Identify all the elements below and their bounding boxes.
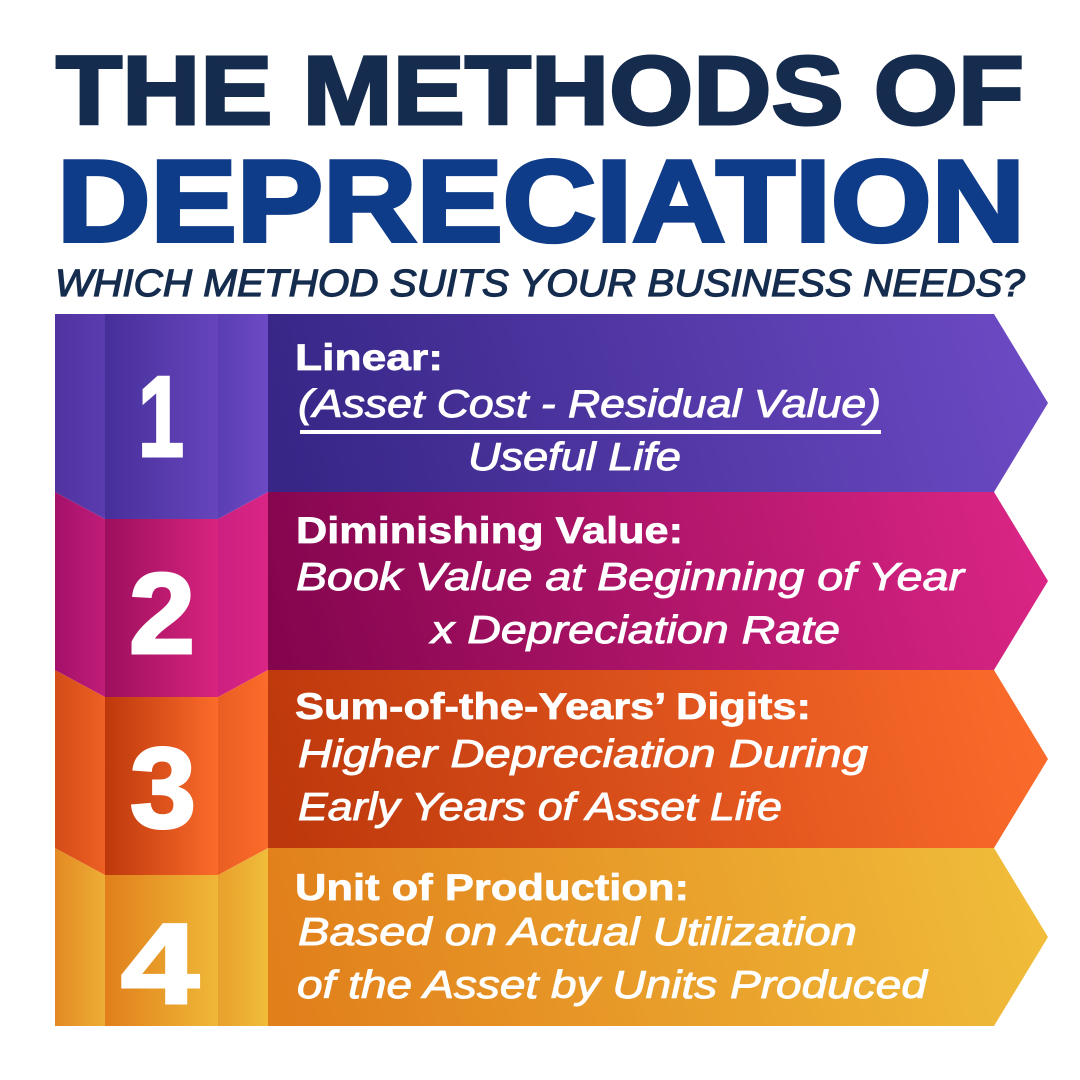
formula: linear xyxy=(298,383,881,479)
formula: book value: Book Value at Beginning of Year xyxy=(296,556,966,599)
panel: row 2 diminishing value xyxy=(55,492,1048,697)
number 2: 2 xyxy=(129,551,195,678)
number 3: 3 xyxy=(130,725,196,852)
number column 2 xyxy=(55,492,268,697)
arrow band 4 xyxy=(268,848,1048,1026)
subtitle: WHICH METHOD SUITS YOUR BUSINESS NEEDS? xyxy=(55,263,1026,305)
number column 3 xyxy=(55,670,268,875)
formula: book value xyxy=(296,556,966,652)
arrow band 2 xyxy=(268,492,1048,670)
panel: row 3 sum of the years digits xyxy=(55,670,1048,875)
title: Depreciation: DEPRECIATION xyxy=(57,136,1025,266)
arrow band 1 xyxy=(268,314,1048,492)
formula: linear: Useful Life xyxy=(468,436,681,479)
number 1: 1 xyxy=(138,354,184,481)
formula: higher depreciation xyxy=(298,733,868,829)
title: The Methods Of: THE METHODS OF xyxy=(56,36,1024,145)
number column 1 xyxy=(55,314,268,519)
heading: Sum-of-the-Years' Digits: Sum-of-the-Years’ Digits: xyxy=(295,686,811,727)
formula: higher depreciation: Higher Depreciation During xyxy=(298,733,868,776)
heading: Linear: Linear: xyxy=(295,337,443,378)
heading: Unit of Production: Unit of Production: xyxy=(295,867,689,908)
arrow band 3 xyxy=(268,670,1048,848)
formula: based on utilization: of the Asset by Units Produced xyxy=(297,964,929,1007)
formula: linear: (Asset Cost - Residual Value) xyxy=(298,383,881,426)
panel: row 1 linear xyxy=(55,314,1048,519)
formula: book value: x Depreciation Rate xyxy=(429,609,840,652)
number column 4 xyxy=(55,848,268,1026)
formula: based on utilization xyxy=(297,911,929,1007)
number 4: 4 xyxy=(121,901,199,1028)
formula: based on utilization: Based on Actual Utilization xyxy=(298,911,857,954)
heading: Diminishing Value: Diminishing Value: xyxy=(296,510,683,551)
formula: higher depreciation: Early Years of Asset Life xyxy=(298,786,782,829)
panel: row 4 unit of production xyxy=(55,848,1048,1028)
